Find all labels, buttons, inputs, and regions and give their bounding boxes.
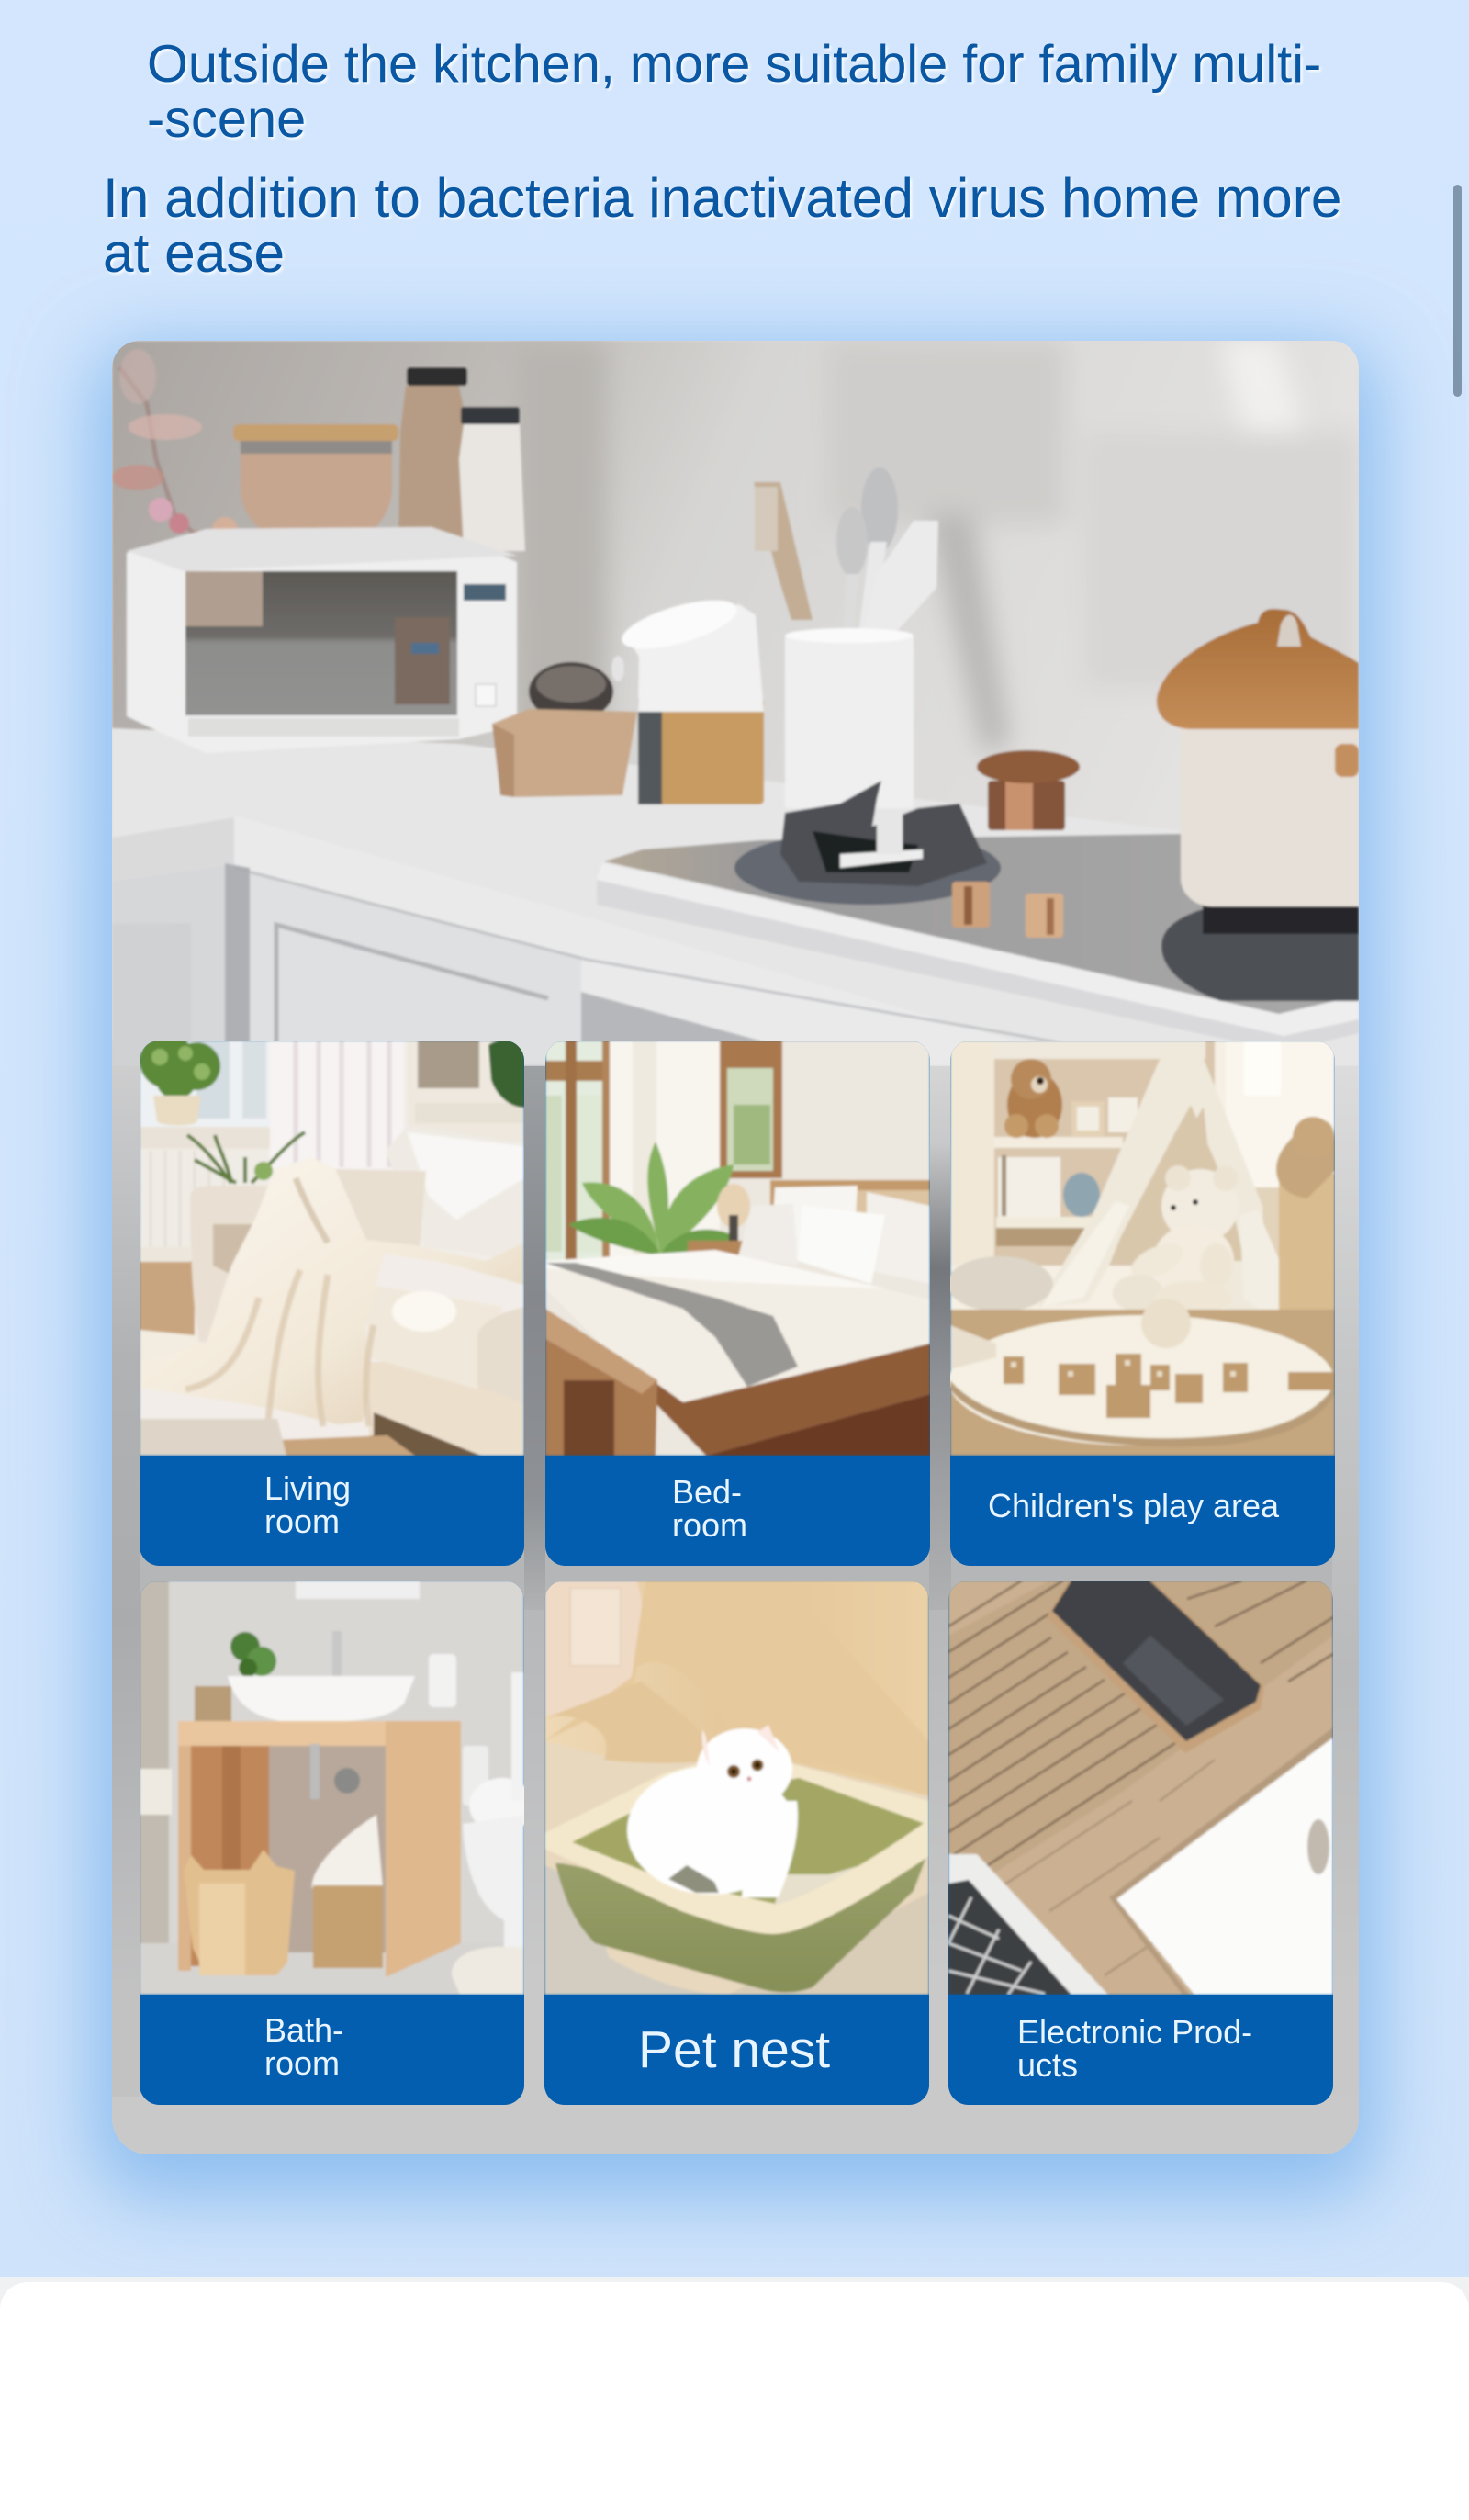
label: electronic products: Electronic Prod-: [1017, 2013, 1252, 2051]
holder and utensils: [754, 482, 813, 620]
label: bedroom: room: [672, 1506, 747, 1544]
photo: kitchen countertop: [112, 341, 1359, 1066]
dispenser: [638, 698, 764, 804]
photo: children's play area: [950, 1041, 1335, 1456]
bowl: [241, 441, 392, 537]
photo: living room: [140, 1041, 524, 1456]
stove: [604, 831, 1359, 1014]
heading: bacteria and virus: at ease: [103, 221, 285, 284]
card: electronic products: [948, 1581, 1333, 2105]
box: [492, 709, 637, 797]
label: pet nest: Pet nest: [638, 2020, 830, 2079]
counter: [112, 728, 1359, 1066]
photo: phone and laptop on wood: [948, 1581, 1333, 1995]
label: pet nest: [544, 1995, 929, 2105]
pot: [1161, 909, 1359, 1001]
label: living room: [140, 1456, 524, 1566]
mesh: [529, 662, 613, 721]
card: bathroom: [140, 1581, 524, 2105]
photo: cat in litter box: [544, 1581, 929, 1995]
label: children's play area: Children's play area: [988, 1487, 1279, 1524]
bottles: [398, 386, 468, 542]
heading: outside the kitchen: -scene: [147, 90, 306, 149]
label: bathroom: [140, 1995, 524, 2105]
photo: bedroom: [545, 1041, 930, 1456]
label: bathroom: Bath-: [264, 2011, 343, 2049]
label: bedroom: [545, 1456, 930, 1566]
flowers: [112, 349, 238, 553]
heading: bacteria and virus: [103, 166, 1342, 284]
card: living room: [140, 1041, 524, 1566]
heading: outside the kitchen: [147, 35, 1322, 149]
label: bathroom: room: [264, 2044, 340, 2082]
salt shaker: [988, 781, 1065, 830]
label: bedroom: Bed-: [672, 1473, 742, 1511]
small cylinders: [952, 882, 990, 928]
heading: bacteria and virus: In addition to bacteria inactivated virus home more: [103, 166, 1341, 229]
photo: bathroom: [140, 1581, 524, 1995]
label: children's play area: [950, 1456, 1335, 1566]
label: electronic products: [948, 1995, 1333, 2105]
label: electronic products: ucts: [1017, 2046, 1078, 2084]
microwave: [127, 527, 517, 753]
label: living room: room: [264, 1502, 340, 1540]
cabinets: [112, 816, 1102, 1066]
card: pet nest: [544, 1581, 929, 2105]
label: living room: Living: [264, 1469, 351, 1507]
card: children's play area: [950, 1041, 1335, 1566]
heading: outside the kitchen: Outside the kitchen, more suitable for family multi-: [147, 35, 1321, 94]
burner: [734, 831, 1001, 905]
panel: blank white footer: [0, 2277, 1469, 2520]
panel: scenes: [112, 341, 1359, 2154]
card: bedroom: [545, 1041, 930, 1566]
scrollbar: [1453, 185, 1462, 397]
